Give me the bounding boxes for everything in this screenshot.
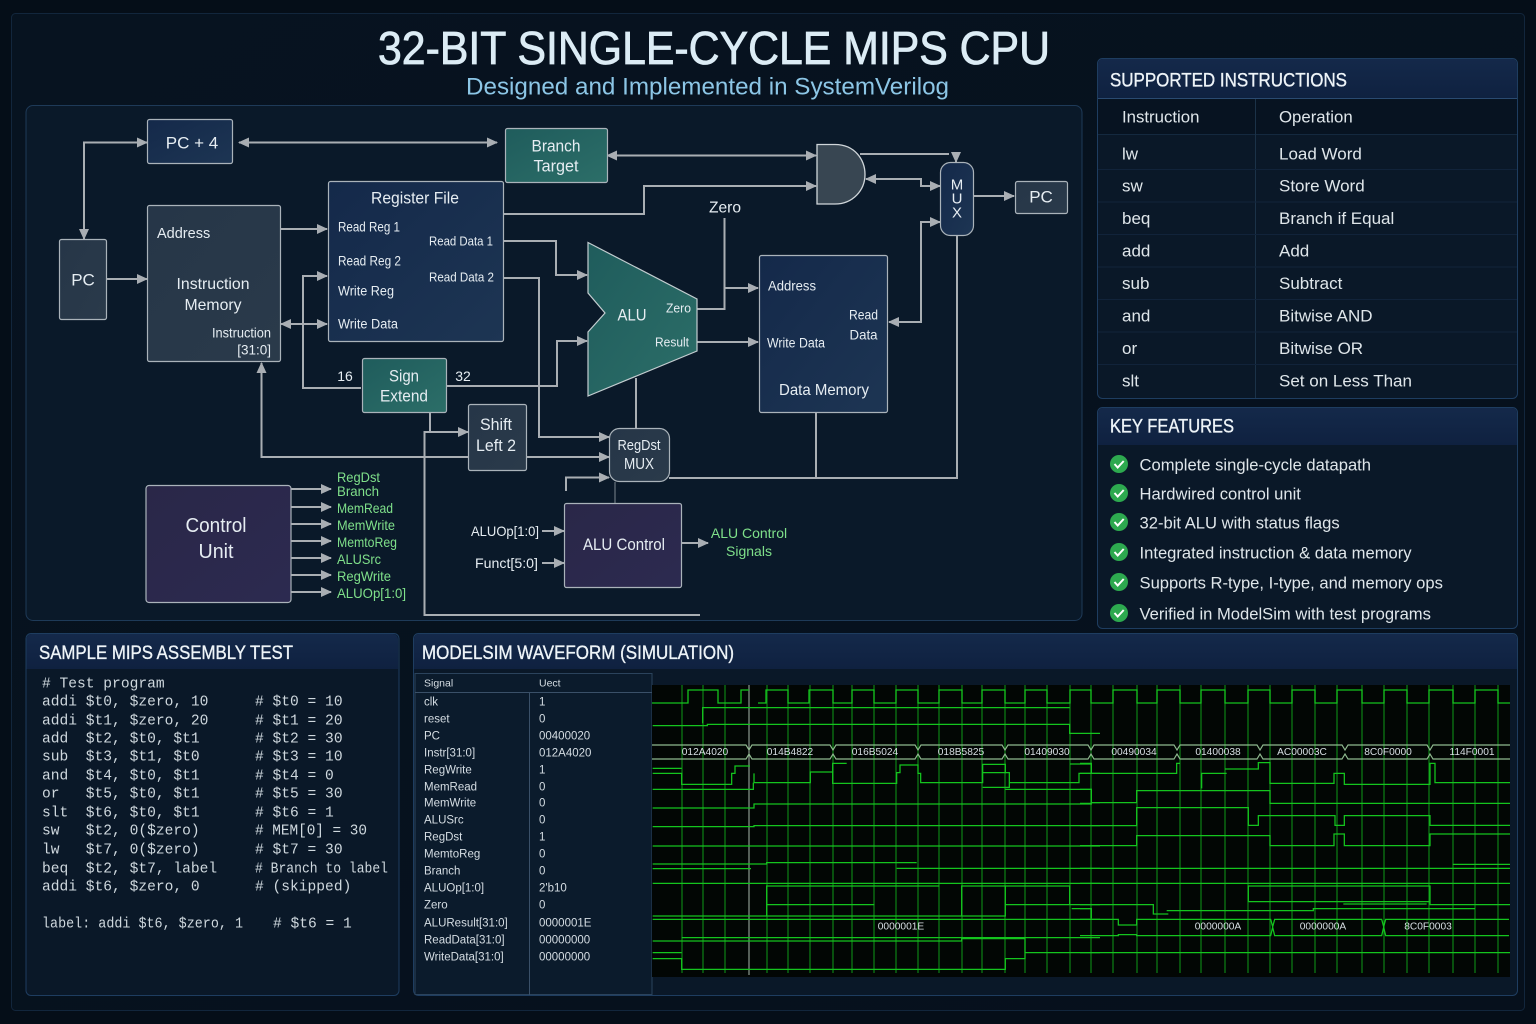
code listing: # $t7 = 30 [255,842,343,858]
code listing: # $t0 = 10 [255,694,343,710]
ALU Control inputs [471,523,539,571]
PC + 4: PC + 4 [166,134,218,152]
ALU [588,242,697,396]
code listing: # $t5 = 30 [255,786,343,802]
code listing: slt $t6, $t0, $t1 [42,806,200,822]
Sign Extend: Sign [389,368,419,386]
code listing: lw $t7, 0($zero) [42,842,200,858]
code listing: # $t6 = 1 [255,806,334,822]
code listing [42,676,388,932]
Data Memory: Read [849,306,878,322]
signal table: MemRead [424,782,477,794]
Branch Target: Target [534,156,579,176]
ALU Control [564,504,682,588]
feature list: Hardwired control unit [1140,484,1301,504]
feature list: Verified in ModelSim with test programs [1140,604,1431,624]
signal table: RegWrite [424,764,472,776]
signal table: ALUOp[1:0] [424,882,484,894]
instruction table: Instruction [1122,108,1199,126]
signal table: MemtoReg [424,848,480,860]
ALU Control inputs: ALUOp[1:0] [471,523,539,539]
code listing: # Branch to label [255,862,388,878]
ALU result values: 0000000A [1195,922,1241,932]
PC output [1016,182,1068,214]
instruction values: 8C0F0000 [1364,747,1412,758]
Register File: Write Data [338,316,398,332]
code listing: beq $t2, $t7, label [42,862,217,878]
Register File: Read Reg 2 [338,254,401,268]
signal table: reset [424,714,450,726]
signal table: PC [424,730,440,742]
feature list: Integrated instruction & data memory [1140,544,1412,562]
Control Unit: Control [186,515,246,537]
signal traces left [653,708,1100,969]
signal table: 0 [539,782,545,794]
Data Memory: Write Data [767,336,825,350]
heading: KEY FEATURES [1110,416,1234,438]
control signals: ALUSrc [337,551,381,567]
ALU Control Signals label: Signals [726,543,772,559]
PC: PC [71,270,95,290]
clock trace [652,690,1510,703]
Register File: Write Reg [338,284,394,298]
instruction table: Operation [1279,108,1353,126]
ALU result values [878,922,1452,932]
ALU Control Signals label: ALU Control [711,525,787,541]
bit width labels: 32 [455,368,471,384]
waveform chart [652,685,1510,977]
Data Memory: Address [768,278,816,294]
instruction values: 012A4020 [682,747,729,758]
instruction table: or [1122,339,1137,358]
PC MUX [940,162,974,236]
PC MUX: M [951,176,963,194]
subtitle: Designed and Implemented in SystemVerilog [466,74,949,100]
instruction values [682,747,1495,758]
panel: sample assembly [26,634,399,996]
code listing: # $t6 = 1 [273,916,352,932]
Register File: Read Data 2 [429,270,494,284]
PC [60,240,106,320]
Instruction Memory: Instruction [176,276,250,293]
signal table: 0 [539,798,545,810]
bit width labels [337,368,471,384]
Zero label: Zero [709,200,741,216]
signal table: clk [424,696,438,708]
signal table: 00000000 [539,934,590,946]
signal table: 0000001E [539,918,592,930]
control signals [337,469,406,601]
signal table: RegDst [424,832,463,844]
code listing: sub $t3, $t1, $t0 [42,750,200,766]
instruction table: Store Word [1279,176,1365,196]
heading: SAMPLE MIPS ASSEMBLY TEST [39,643,293,664]
code listing: # MEM[0] = 30 [255,824,367,840]
RegDst MUX [610,428,670,482]
panel: datapath diagram [26,106,1082,620]
Sign Extend [362,358,446,412]
signal table: 2'b10 [539,882,567,894]
ALU: Result [655,334,689,350]
signal table: Zero [424,900,448,912]
Instruction Memory: [31:0] [237,342,271,358]
signal table: ReadData[31:0] [424,934,505,946]
Shift Left 2 [468,404,526,470]
feature list: Supports R-type, I-type, and memory ops [1140,574,1443,592]
RegDst MUX: RegDst [618,437,661,454]
signal table: Instr[31:0] [424,748,475,760]
instruction table: sub [1122,274,1149,293]
instruction values: AC00003C [1277,747,1327,758]
signal table: Signal [424,678,453,690]
instruction table: Set on Less Than [1279,372,1412,390]
Shift Left 2: Shift [480,416,512,434]
ALU Control inputs: Funct[5:0] [475,555,538,571]
code listing: and $t4, $t0, $t1 [42,768,200,784]
control signals: MemtoReg [337,534,397,550]
instruction table: lw [1122,144,1139,164]
feature list: Complete single-cycle datapath [1140,456,1371,474]
code listing: # Test program [42,676,165,692]
control signals: ALUOp[1:0] [337,585,406,601]
signal table: Branch [424,866,460,878]
instruction table: and [1122,306,1150,326]
signal table: 0 [539,866,545,878]
instruction table: Bitwise OR [1279,339,1363,358]
signal table: Uect [539,678,561,690]
Control Unit: Unit [198,541,234,563]
PC MUX: X [952,204,962,222]
panel: modelsim waveform [414,634,1518,996]
signal table: 1 [539,832,545,844]
control signals: Branch [337,483,379,499]
instruction values: 01400038 [1195,747,1241,758]
Data Memory [760,256,888,412]
ALU result values: 8C0F0003 [1404,922,1452,932]
signal table: WriteData[31:0] [424,952,504,964]
signal table: 0 [539,714,545,726]
control signals: MemRead [337,500,393,516]
Register File: Read Data 1 [429,234,493,248]
code listing: addi $t1, $zero, 20 [42,714,208,730]
instruction table: Load Word [1279,144,1362,164]
control signals: RegWrite [337,568,391,584]
signal table: 0 [539,848,545,860]
signal traces right [1080,763,1510,953]
ALU: Zero [666,300,691,316]
signal table: ALUResult[31:0] [424,918,508,930]
control signals: RegDst [337,469,380,485]
Instruction Memory: Address [157,226,210,242]
code listing: # (skipped) [255,880,351,896]
ALU result values: 0000000A [1300,922,1346,932]
Instruction Memory [148,206,280,362]
ALU: ALU [618,306,646,324]
heading: MODELSIM WAVEFORM (SIMULATION) [422,643,734,664]
feature list [1110,455,1443,624]
instruction values: 114F0001 [1449,747,1495,758]
code listing: # $t4 = 0 [255,768,334,784]
code listing: # $t3 = 10 [255,750,343,766]
signal table [415,674,652,995]
panel: key features [1098,408,1518,628]
instruction table: sw [1122,176,1144,196]
Branch Target: Branch [532,136,580,156]
code listing: label: addi $t6, $zero, 1 [42,916,243,932]
signal table: 00000000 [539,952,590,964]
instruction table: Branch if Equal [1279,209,1394,228]
PC + 4 [148,120,232,164]
instruction table: Add [1279,242,1309,260]
title: 32-BIT SINGLE-CYCLE MIPS CPU [378,22,1050,74]
signal table: 012A4020 [539,748,591,760]
Register File: Register File [371,190,459,208]
signal table: 1 [539,696,545,708]
wires [84,142,1014,615]
instruction table [1122,108,1412,390]
Control Unit [146,486,291,602]
instruction table: beq [1122,209,1150,228]
instruction bus [652,745,1510,759]
feature list: 32-bit ALU with status flags [1140,514,1340,532]
Data Memory: Data Memory [779,382,869,399]
Instruction Memory: Memory [184,297,242,314]
code listing: addi $t6, $zero, 0 [42,880,200,896]
AND gate [817,144,865,204]
signal table: MemWrite [424,798,476,810]
code listing: addi $t0, $zero, 10 [42,694,208,710]
ALU Control Signals label [711,525,787,559]
ALU result values: 0000001E [878,922,924,932]
RegDst MUX: MUX [624,456,655,473]
signal table: 0 [539,900,545,912]
Register File: Read Reg 1 [338,220,400,234]
instruction table: add [1122,242,1150,260]
code listing: sw $t2, 0($zero) [42,824,200,840]
signal table: 1 [539,764,545,776]
code listing: # $t2 = 30 [255,732,343,748]
instruction table: Bitwise AND [1279,306,1373,326]
PC MUX: U [952,190,962,208]
instruction values: 00490034 [1111,747,1157,758]
code listing: add $t2, $t0, $t1 [42,732,200,748]
Sign Extend: Extend [380,388,428,406]
code listing: or $t5, $t0, $t1 [42,786,200,802]
instruction values: 018B5825 [938,747,985,758]
signal table: 00400020 [539,730,590,742]
heading: SUPPORTED INSTRUCTIONS [1110,70,1347,92]
ALU Control: ALU Control [583,536,665,554]
instruction values: 01409030 [1024,747,1070,758]
instruction values: 014B4822 [767,747,814,758]
panel: supported instructions [1098,58,1518,398]
control signals: MemWrite [337,517,395,533]
bit width labels: 16 [337,368,353,384]
instruction table: Subtract [1279,274,1343,293]
Register File [328,182,504,342]
PC output: PC [1029,188,1053,206]
Branch Target [506,128,608,182]
Data Memory: Data [850,326,878,342]
signal table: 0 [539,814,545,826]
instruction values: 016B5024 [852,747,899,758]
Instruction Memory: Instruction [212,326,271,340]
Shift Left 2: Left 2 [476,437,516,455]
code listing: # $t1 = 20 [255,714,343,730]
signal table: ALUSrc [424,814,464,826]
instruction table: slt [1122,372,1139,390]
